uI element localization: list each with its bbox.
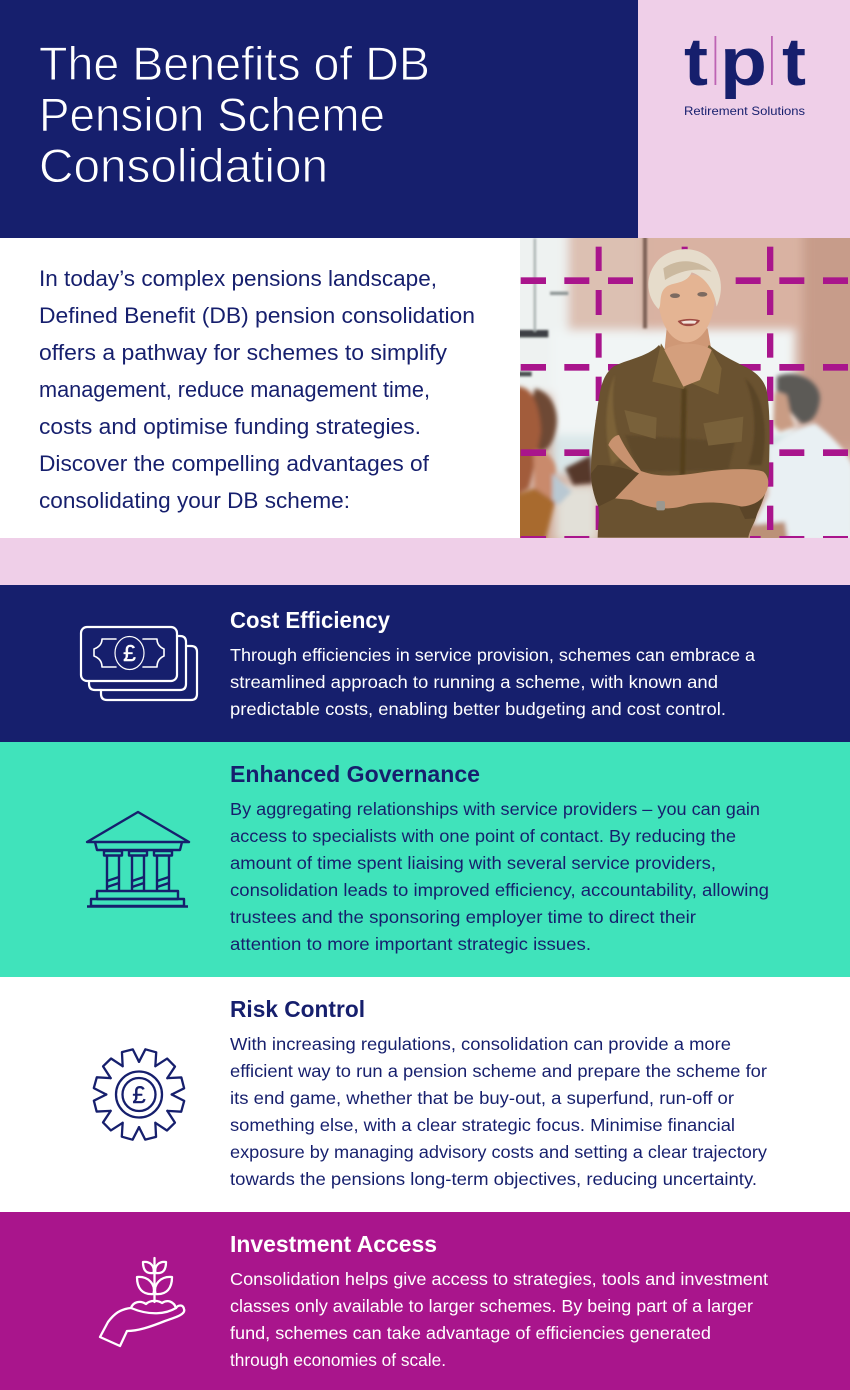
icon: gear with pound sign: £ — [132, 1082, 146, 1109]
body text: classes only available to larger schemes. By being part of a larger — [230, 1296, 753, 1316]
panel: Cost Efficiency — [0, 585, 850, 742]
panel: Enhanced Governance — [0, 742, 850, 977]
woman — [591, 249, 770, 538]
logo tagline: Retirement Solutions — [684, 104, 805, 118]
icon: classical bank building — [87, 812, 189, 906]
body text: through economies of scale. — [230, 1350, 446, 1370]
body text: access to specialists with one point of contact. By reducing the — [230, 826, 736, 846]
body text: attention to more important strategic issues. — [230, 934, 591, 954]
logo wordmark: t — [782, 24, 806, 100]
heading: Risk Control — [230, 996, 365, 1022]
title: The Benefits of DB — [39, 37, 430, 90]
dashed grid — [521, 247, 848, 543]
body text: Consolidation helps give access to strategies, tools and investment — [230, 1269, 768, 1289]
heading: Cost Efficiency — [230, 607, 390, 633]
intro text block: consolidating your DB scheme: — [39, 488, 350, 513]
logo panel: tpt Retirement Solutions — [638, 0, 850, 238]
intro text block: Defined Benefit (DB) pension consolidation — [39, 303, 475, 328]
header panel: title — [0, 0, 638, 238]
body text — [230, 799, 769, 954]
intro text block: offers a pathway for schemes to simplify — [39, 340, 447, 365]
intro text block: costs and optimise funding strategies. — [39, 414, 421, 439]
title: Pension Scheme — [39, 88, 385, 141]
body text: predictable costs, enabling better budgeting and cost control. — [230, 699, 726, 719]
heading: Enhanced Governance — [230, 761, 480, 787]
pink divider band — [0, 538, 850, 585]
body text: By aggregating relationships with service providers – you can gain — [230, 799, 760, 819]
intro text block — [39, 266, 475, 513]
body text — [230, 1034, 767, 1189]
title: Consolidation — [39, 139, 328, 192]
icon: hand holding a growing plant — [100, 1258, 184, 1346]
body text — [230, 645, 755, 719]
body text: fund, schemes can take advantage of efficiencies generated — [230, 1323, 711, 1343]
body text: streamlined approach to running a scheme, with known and — [230, 672, 718, 692]
intro text block: management, reduce management time, — [39, 377, 430, 402]
body text: Through efficiencies in service provision, schemes can embrace a — [230, 645, 755, 665]
panel: Risk Control — [0, 977, 850, 1212]
title — [39, 37, 430, 192]
logo wordmark: p — [720, 24, 767, 100]
icon: banknotes with pound sign — [81, 627, 197, 700]
body text: With increasing regulations, consolidation can provide a more — [230, 1034, 731, 1054]
body text: exposure by managing advisory costs and setting a clear trajectory — [230, 1142, 767, 1162]
body text: towards the pensions long-term objectives, reducing uncertainty. — [230, 1169, 757, 1189]
logo wordmark — [684, 24, 806, 100]
body text: amount of time spent liaising with several service providers, — [230, 853, 716, 873]
body text: its end game, whether that be buy-out, a superfund, run-off or — [230, 1088, 734, 1108]
logo wordmark: t — [684, 24, 708, 100]
intro text block: Discover the compelling advantages of — [39, 451, 430, 476]
body text: consolidation leads to improved efficiency, accountability, allowing — [230, 880, 769, 900]
heading: Investment Access — [230, 1231, 437, 1257]
panel: Investment Access — [0, 1212, 850, 1390]
icon: banknotes with pound sign: £ — [123, 640, 136, 666]
icon: gear with pound sign — [91, 1047, 187, 1142]
photo: smiling woman with arms crossed in an office, magenta dashed grid — [520, 238, 850, 538]
body text — [230, 1269, 768, 1370]
body text: efficient way to run a pension scheme and prepare the scheme for — [230, 1061, 767, 1081]
intro text block: In today’s complex pensions landscape, — [39, 266, 437, 291]
body text: something else, with a clear strategic focus. Minimise financial — [230, 1115, 735, 1135]
body text: trustees and the sponsoring employer time to direct their — [230, 907, 696, 927]
